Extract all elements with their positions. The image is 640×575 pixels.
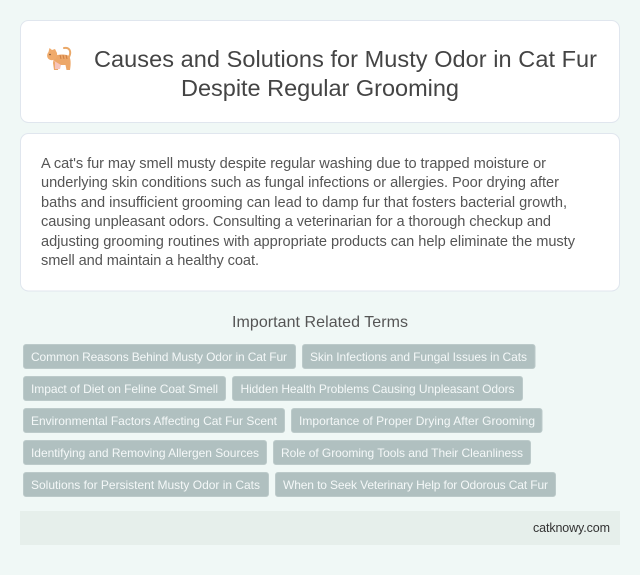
chip: common reasons: Common Reasons Behind Musty Odor in Cat Fur xyxy=(31,350,287,364)
chip: grooming tools: Role of Grooming Tools and Their Cleanliness xyxy=(281,446,523,460)
description text: smell and maintain a healthy coat. xyxy=(41,253,259,269)
description text: A cat's fur may smell musty despite regular washing due to trapped moisture or xyxy=(41,156,546,172)
chip: persistent odor solutions xyxy=(24,472,268,496)
chip: grooming tools xyxy=(274,440,530,464)
title text: Despite Regular Grooming xyxy=(181,75,459,101)
chip: proper drying: Importance of Proper Drying After Grooming xyxy=(299,414,535,428)
title text: Causes and Solutions for Musty Odor in Cat Fur xyxy=(94,46,597,72)
description text: underlying skin conditions such as fungal infections or allergies. Poor drying after xyxy=(41,175,559,191)
footer source text: catknowy.com xyxy=(533,521,610,535)
chip: allergen sources xyxy=(24,440,266,464)
panel: title card xyxy=(20,20,620,122)
chip: hidden health problems: Hidden Health Problems Causing Unpleasant Odors xyxy=(240,382,514,396)
description text: adjusting grooming routines with appropriate products can help eliminate the musty xyxy=(41,234,576,250)
panel: description card xyxy=(20,134,620,291)
chip: environmental factors xyxy=(24,408,284,432)
chip: environmental factors: Environmental Factors Affecting Cat Fur Scent xyxy=(31,414,278,428)
chip: allergen sources: Identifying and Removing Allergen Sources xyxy=(31,446,259,460)
chip: common reasons xyxy=(24,344,296,368)
chip: proper drying xyxy=(292,408,542,432)
chip: veterinary help: When to Seek Veterinary Help for Odorous Cat Fur xyxy=(283,478,548,492)
heading: important related terms: Important Related Terms xyxy=(232,314,408,331)
related terms chips xyxy=(24,344,556,496)
chip: impact of diet: Impact of Diet on Feline Coat Smell xyxy=(31,382,218,396)
chip: impact of diet xyxy=(24,376,226,400)
chip: persistent odor solutions: Solutions for Persistent Musty Odor in Cats xyxy=(31,478,260,492)
chip: hidden health problems xyxy=(232,376,522,400)
chip: skin infections xyxy=(302,344,535,368)
chip: skin infections: Skin Infections and Fungal Issues in Cats xyxy=(310,350,527,364)
title text xyxy=(94,46,597,101)
footer xyxy=(20,511,620,545)
chip: veterinary help xyxy=(276,472,556,496)
description text: causing unpleasant odors. Consulting a veterinarian for a thorough checkup and xyxy=(41,214,551,230)
description text: baths and insufficient grooming can lead to damp fur that fosters bacterial growth, xyxy=(41,195,567,211)
description text xyxy=(41,156,576,269)
icon: cat xyxy=(47,48,71,70)
